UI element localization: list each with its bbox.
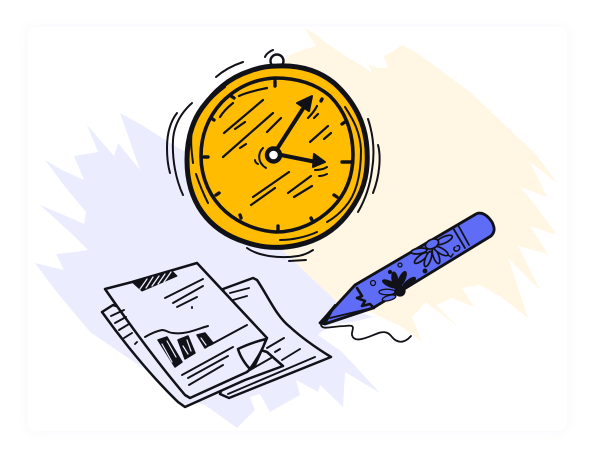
pen nib (320, 305, 335, 323)
ink squiggle (321, 324, 411, 342)
minute hand (277, 107, 304, 149)
folder line (145, 326, 208, 337)
flower bottom (379, 271, 417, 302)
chart axis line (210, 325, 247, 345)
brush stroke: blue (35, 113, 380, 428)
hour ticks (204, 81, 352, 231)
text lines (111, 279, 315, 394)
folded corner (238, 339, 266, 369)
left back sheet (102, 305, 283, 407)
clock hub (267, 148, 280, 162)
face glints (220, 88, 331, 205)
brush stroke: yellow (200, 28, 557, 342)
flower top (411, 233, 454, 267)
front sheet (105, 263, 267, 398)
nib shadow (330, 308, 372, 318)
header block (132, 271, 177, 291)
hub glints (255, 148, 327, 176)
hour hand (281, 155, 316, 162)
pen body (320, 213, 494, 324)
clock inner ring (201, 78, 353, 232)
clock face (187, 66, 367, 247)
rim details (191, 87, 361, 240)
small dots (370, 263, 427, 286)
bar chart (158, 333, 213, 367)
pen doodle (448, 246, 460, 257)
clock loop (270, 54, 284, 68)
icon: clock (167, 50, 380, 261)
zigzag collar (357, 288, 374, 308)
icon: documents (102, 263, 331, 407)
motion lines (167, 50, 380, 261)
right back sheet (220, 278, 331, 398)
panel: card background (28, 27, 567, 431)
icon: pen (320, 213, 494, 342)
band lines (453, 225, 469, 248)
